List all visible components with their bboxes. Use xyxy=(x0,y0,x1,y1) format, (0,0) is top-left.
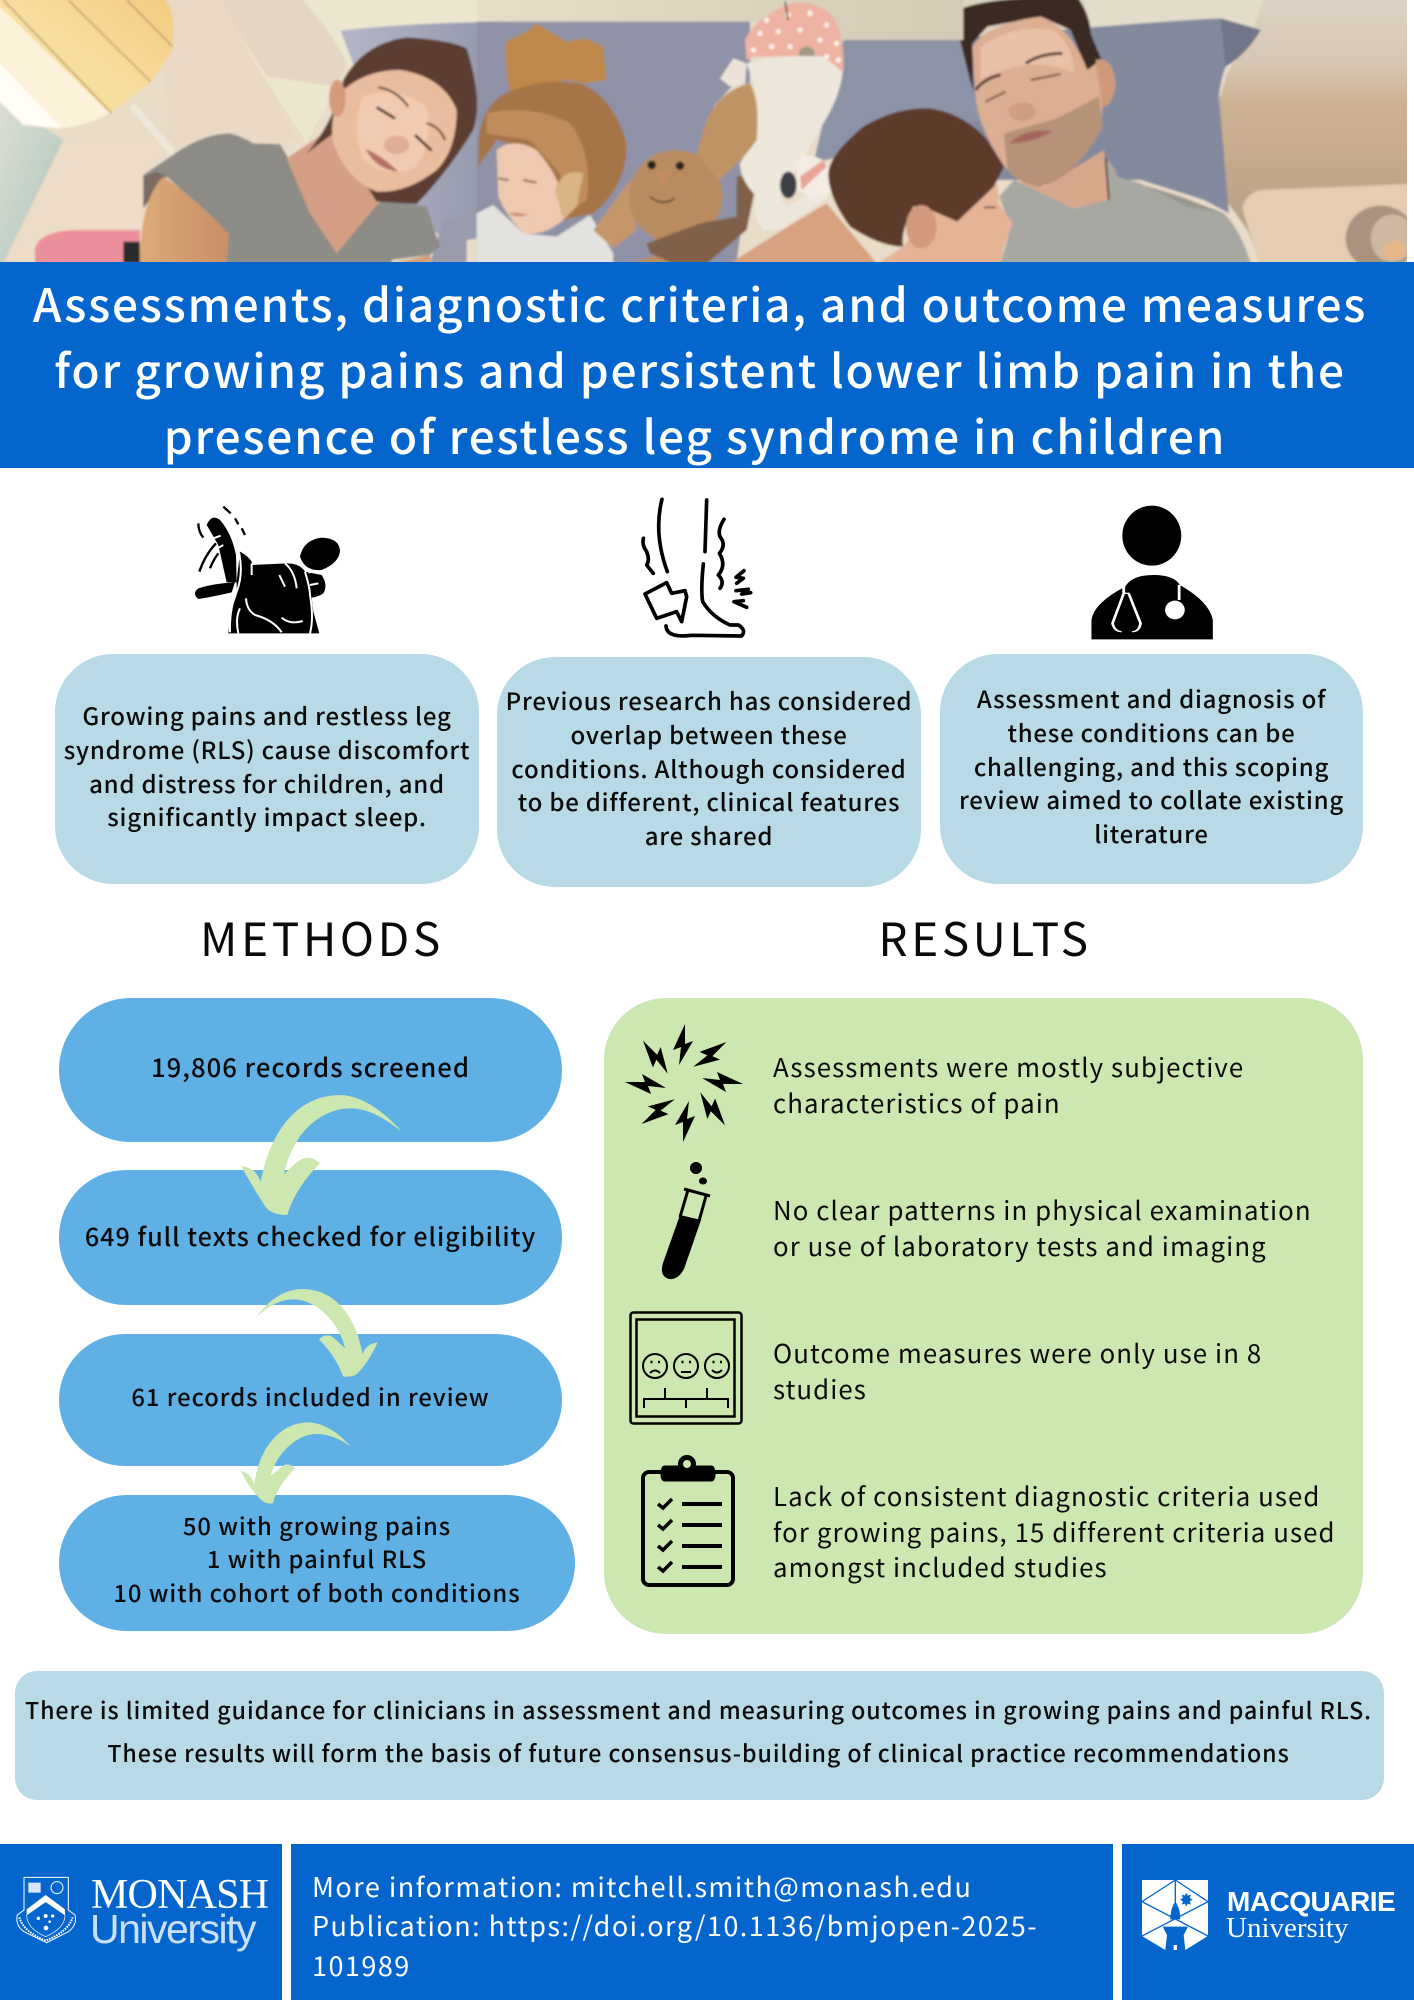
icon: doctor with stethoscope xyxy=(1091,506,1213,640)
backdrop xyxy=(0,0,1414,267)
Monash wordmark: MONASH xyxy=(91,1872,268,1918)
arrow: from included to breakdown xyxy=(241,1422,350,1504)
text: 19,806 records screened xyxy=(151,1048,470,1085)
title band xyxy=(0,262,1414,468)
result text: diagnostic criteria: Lack of consistent diagnostic criteria used xyxy=(773,1477,1320,1514)
arrow: from screened to full texts xyxy=(241,1095,402,1215)
panel: background statement 1 xyxy=(55,654,479,884)
text: challenging, and this scoping xyxy=(974,748,1329,783)
title xyxy=(32,270,1367,468)
text xyxy=(113,1506,521,1609)
text: conditions. Although considered xyxy=(511,750,907,785)
conclusion text: There is limited guidance for clinicians in assessment and measuring outcomes in growing pains and painful RLS. xyxy=(25,1692,1372,1726)
heading: methods: METHODS xyxy=(200,904,444,970)
title: presence of restless leg syndrome in children xyxy=(164,402,1226,468)
text: overlap between these xyxy=(570,716,848,751)
title: Assessments, diagnostic criteria, and outcome measures xyxy=(33,270,1367,336)
Monash University wordmark: University xyxy=(90,1906,255,1952)
text: review aimed to collate existing xyxy=(959,781,1344,816)
text: these conditions can be xyxy=(1007,714,1296,749)
text: and distress for children, and xyxy=(89,765,445,800)
contact text xyxy=(312,1866,1038,1984)
text xyxy=(64,697,470,833)
result text: assessments: Assessments were mostly subjective xyxy=(773,1048,1244,1085)
result text: outcome measures: studies xyxy=(773,1370,867,1406)
conclusion text xyxy=(25,1692,1372,1769)
text: 1 with painful RLS xyxy=(207,1540,427,1575)
panel: background statement 3 xyxy=(940,654,1363,884)
text: are shared xyxy=(645,817,773,852)
right wall and man xyxy=(911,0,1414,271)
text: literature xyxy=(1094,815,1209,850)
panel: results xyxy=(604,998,1363,1634)
text: 61 records included in review xyxy=(131,1378,490,1413)
woman xyxy=(140,37,477,263)
text: 649 full texts checked for eligibility xyxy=(85,1218,536,1254)
result text: diagnostic criteria: for growing pains, 15 different criteria used xyxy=(773,1512,1336,1550)
footer panel: Macquarie University logo xyxy=(1122,1844,1414,2000)
contact text: More information: mitchell.smith@monash.edu xyxy=(312,1866,972,1905)
result text: physical examination xyxy=(773,1191,1312,1264)
pill: full texts checked xyxy=(59,1170,562,1305)
photo: family sleeping in bed xyxy=(0,0,1407,262)
icon: clipboard checklist xyxy=(641,1455,735,1587)
panel: conclusion xyxy=(15,1671,1384,1800)
text: syndrome (RLS) cause discomfort xyxy=(64,731,470,766)
pill: breakdown of records xyxy=(59,1495,575,1631)
result text: physical examination: or use of laboratory tests and imaging xyxy=(773,1226,1267,1264)
icon: pain scale with faces xyxy=(629,1311,743,1425)
text: 10 with cohort of both conditions xyxy=(113,1574,521,1609)
text: significantly impact sleep. xyxy=(107,798,427,833)
contact text: 101989 xyxy=(312,1945,411,1984)
footer panel: contact information xyxy=(291,1844,1113,2000)
middle backdrop: top band and pillows xyxy=(477,0,980,263)
icon: pain burst xyxy=(625,1024,743,1142)
conclusion text: These results will form the basis of future consensus-building of clinical practice recommendations xyxy=(107,1735,1290,1769)
panel: background statement 2 xyxy=(497,657,921,887)
result text: outcome measures: Outcome measures were only use in 8 xyxy=(773,1334,1262,1371)
result text: assessments: characteristics of pain xyxy=(773,1084,1061,1120)
text xyxy=(506,682,912,852)
text: 50 with growing pains xyxy=(183,1506,451,1542)
result text: assessments xyxy=(773,1048,1244,1120)
text: Assessment and diagnosis of xyxy=(977,680,1326,715)
Macquarie University wordmark: University xyxy=(1226,1912,1348,1944)
title: for growing pains and persistent lower limb pain in the xyxy=(54,336,1346,402)
icon: leg and foot with pain xyxy=(641,498,752,638)
pill: records screened xyxy=(59,998,562,1142)
text xyxy=(959,680,1344,850)
result text: physical examination: No clear patterns in physical examination xyxy=(773,1191,1312,1228)
arrow: from full texts to included xyxy=(258,1289,378,1377)
crest xyxy=(16,1876,76,1944)
pill: records included xyxy=(59,1334,562,1466)
result text: outcome measures xyxy=(773,1334,1262,1406)
middle: girl, toys, boy xyxy=(477,2,877,263)
text: Growing pains and restless leg xyxy=(82,697,452,732)
shield xyxy=(1142,1880,1208,1950)
boy xyxy=(828,108,1012,263)
footer panel: Monash University logo xyxy=(0,1844,282,2000)
icon: person with restless leg xyxy=(195,506,340,634)
contact text: Publication: https://doi.org/10.1136/bmjopen-2025- xyxy=(312,1905,1038,1944)
heading: results: RESULTS xyxy=(878,904,1092,970)
Macquarie wordmark: MACQUARIE xyxy=(1227,1886,1395,1917)
text: to be different, clinical features xyxy=(518,783,900,818)
result text: diagnostic criteria xyxy=(773,1477,1336,1585)
icon: test tube xyxy=(662,1162,710,1280)
result text: diagnostic criteria: amongst included studies xyxy=(773,1548,1108,1585)
text: Previous research has considered xyxy=(506,682,912,717)
